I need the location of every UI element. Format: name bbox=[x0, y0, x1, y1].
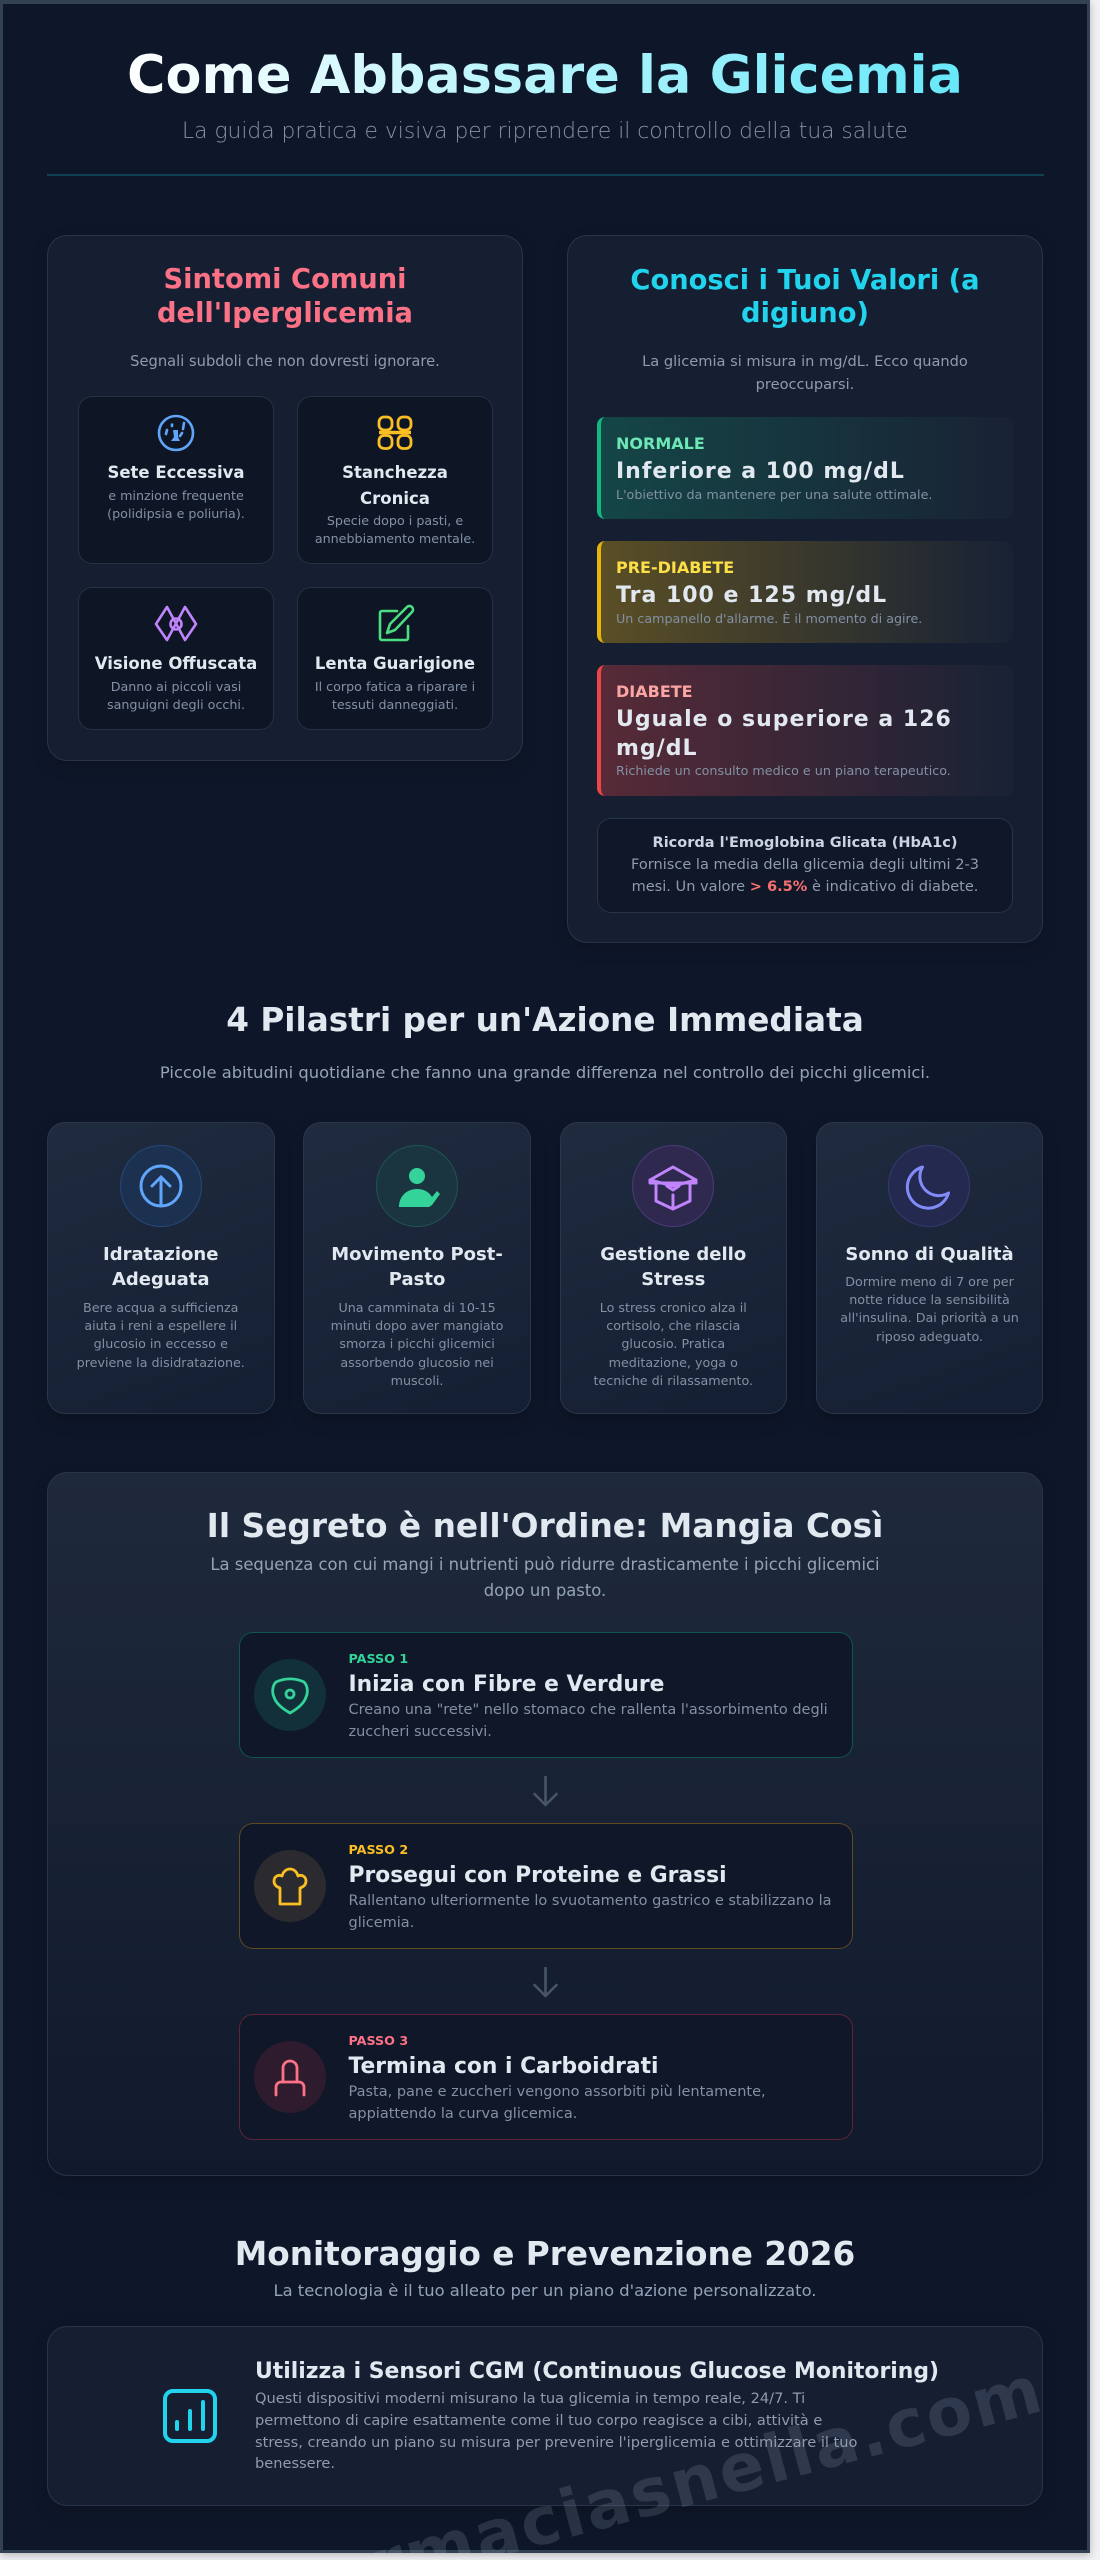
step title: Termina con i Carboidrati bbox=[348, 2054, 659, 2079]
pillar description: aiuta i reni a espellere il bbox=[84, 1318, 237, 1333]
pillar description: muscoli. bbox=[391, 1373, 443, 1388]
panel: eating order bbox=[47, 1472, 1043, 2176]
symptom description: Danno ai piccoli vasi bbox=[111, 679, 241, 694]
step description: Pasta, pane e zuccheri vengono assorbiti più lentamente, bbox=[348, 2084, 766, 2100]
level note: Richiede un consulto medico e un piano terapeutico. bbox=[616, 763, 951, 778]
symptom title: Visione Offuscata bbox=[95, 654, 257, 673]
pillar description: notte riduce la sensibilità bbox=[849, 1292, 1010, 1307]
pillar description: tecniche di rilassamento. bbox=[593, 1373, 753, 1388]
level note: L'obiettivo da mantenere per una salute ottimale. bbox=[616, 487, 932, 502]
subtitle: La guida pratica e visiva per riprendere il controllo della tua salute bbox=[182, 119, 908, 144]
level card: normal bbox=[597, 417, 1013, 519]
panel title: Utilizza i Sensori CGM (Continuous Glucose Monitoring) bbox=[255, 2359, 939, 2384]
symptom card: fatigue bbox=[297, 396, 493, 564]
section intro: eating order: La sequenza con cui mangi i nutrienti può ridurre drasticamente i picchi glicemici bbox=[210, 1555, 880, 1574]
pillar title bbox=[600, 1244, 746, 1290]
symptom description: annebbiamento mentale. bbox=[315, 531, 475, 546]
pillar description: previene la disidratazione. bbox=[77, 1355, 245, 1370]
pillar description: glucosio in eccesso e bbox=[94, 1336, 228, 1351]
symptom description: sanguigni degli occhi. bbox=[107, 697, 245, 712]
step 2 card bbox=[238, 1823, 852, 1949]
level card: pre-diabetes bbox=[597, 541, 1013, 643]
section heading: eating order: Il Segreto è nell'Ordine: Mangia Così bbox=[207, 1507, 883, 1545]
symptom card: slow healing bbox=[297, 587, 493, 730]
pillar title: Gestione dello bbox=[600, 1244, 746, 1265]
panel description bbox=[255, 2390, 857, 2472]
callout text: Fornisce la media della glicemia degli ultimi 2-3 bbox=[631, 856, 979, 873]
pillar title bbox=[103, 1244, 218, 1290]
pillar description: minuti dopo aver mangiato bbox=[331, 1318, 503, 1333]
symptom description: e minzione frequente bbox=[108, 488, 244, 503]
level label: DIABETE bbox=[616, 682, 693, 701]
pillar card: sleep bbox=[816, 1122, 1043, 1414]
icon: sleep bbox=[888, 1145, 970, 1227]
step label: PASSO 1 bbox=[348, 1651, 408, 1666]
step title: Inizia con Fibre e Verdure bbox=[348, 1672, 664, 1697]
level value: Uguale o superiore a 126 bbox=[616, 707, 952, 732]
symptom description bbox=[107, 679, 245, 712]
pillar card: stress bbox=[560, 1122, 787, 1414]
step description: glicemia. bbox=[348, 1915, 414, 1931]
panel heading: glucose values: Conosci i Tuoi Valori (a bbox=[630, 265, 980, 296]
pillar description: Bere acqua a sufficienza bbox=[83, 1300, 238, 1315]
step description: Creano una "rete" nello stomaco che rallenta l'assorbimento degli bbox=[348, 1702, 828, 1718]
arrow: step 2 to step 3 bbox=[533, 1967, 558, 1998]
symptom description: (polidipsia e poliuria). bbox=[107, 506, 245, 521]
level card: diabetes bbox=[597, 665, 1013, 796]
section intro: pillars: Piccole abitudini quotidiane che fanno una grande differenza nel controllo dei picchi glicemici. bbox=[160, 1063, 930, 1082]
level value bbox=[616, 707, 952, 761]
icon: thirst bbox=[158, 414, 194, 452]
panel description: stress, creando un piano su misura per prevenire l'iperglicemia e ottimizzare il tuo bbox=[255, 2434, 857, 2451]
values intro bbox=[642, 353, 968, 392]
panel heading: glucose values bbox=[630, 265, 980, 329]
header bbox=[47, 45, 1044, 176]
title: Come Abbassare la Glicemia bbox=[127, 45, 963, 106]
pillar title bbox=[331, 1244, 503, 1290]
pillar card: movement bbox=[303, 1122, 531, 1414]
icon: slow healing bbox=[378, 604, 414, 642]
panel: glucose values bbox=[567, 235, 1043, 943]
pillar description bbox=[840, 1274, 1019, 1344]
step description bbox=[348, 2084, 766, 2122]
arrow: step 1 to step 2 bbox=[533, 1776, 558, 1806]
step 3 card bbox=[238, 2014, 852, 2140]
values intro: La glicemia si misura in mg/dL. Ecco quando bbox=[642, 353, 968, 370]
symptom title bbox=[342, 463, 448, 508]
panel heading: glucose values: digiuno) bbox=[741, 298, 869, 329]
icon: hydration bbox=[120, 1145, 202, 1227]
level value: mg/dL bbox=[616, 736, 697, 761]
icon: blurred vision bbox=[154, 606, 198, 642]
icon: CGM chart bbox=[163, 2389, 217, 2443]
section intro: monitoring: La tecnologia è il tuo alleato per un piano d'azione personalizzato. bbox=[273, 2281, 816, 2300]
pillar title: Sonno di Qualità bbox=[845, 1244, 1014, 1265]
icon: fatigue bbox=[378, 416, 412, 450]
step label: PASSO 3 bbox=[348, 2033, 408, 2048]
panel heading: symptoms: dell'Iperglicemia bbox=[157, 298, 413, 329]
callout title: Ricorda l'Emoglobina Glicata (HbA1c) bbox=[653, 835, 957, 851]
symptom card: blurred vision bbox=[78, 587, 274, 730]
callout: HbA1c bbox=[597, 818, 1013, 913]
level label: PRE-DIABETE bbox=[616, 558, 734, 577]
symptom description: Il corpo fatica a riparare i bbox=[315, 679, 475, 694]
pillar description: meditazione, yoga o bbox=[609, 1355, 738, 1370]
symptom description bbox=[315, 679, 475, 712]
step description bbox=[348, 1702, 828, 1740]
symptom description bbox=[107, 488, 245, 521]
panel description: permettono di capire esattamente come il tuo corpo reagisce a cibi, attività e bbox=[255, 2412, 822, 2429]
step title: Prosegui con Proteine e Grassi bbox=[348, 1863, 727, 1888]
level value: Tra 100 e 125 mg/dL bbox=[616, 583, 887, 608]
pillar description: riposo adeguato. bbox=[876, 1329, 983, 1344]
callout text bbox=[631, 856, 979, 895]
header divider bbox=[47, 174, 1044, 176]
step label: PASSO 2 bbox=[348, 1842, 408, 1857]
panel heading: symptoms bbox=[157, 264, 413, 329]
icon: chef hat bbox=[254, 1850, 326, 1922]
pillar description: Una camminata di 10-15 bbox=[338, 1300, 496, 1315]
symptom description: tessuti danneggiati. bbox=[332, 697, 458, 712]
icon: carbohydrates bbox=[254, 2041, 326, 2113]
pillar description: Lo stress cronico alza il bbox=[600, 1300, 747, 1315]
section heading: pillars: 4 Pilastri per un'Azione Immediata bbox=[226, 1001, 864, 1039]
icon: fibre shield bbox=[254, 1659, 326, 1731]
pillar title: Movimento Post- bbox=[331, 1244, 503, 1265]
pillar title: Stress bbox=[641, 1269, 705, 1290]
step description bbox=[348, 1893, 831, 1931]
symptom description bbox=[315, 513, 475, 546]
symptom title: Stanchezza bbox=[342, 463, 448, 482]
pillar description bbox=[77, 1300, 245, 1370]
step description: zuccheri successivi. bbox=[348, 1724, 492, 1740]
step 1 card bbox=[238, 1632, 852, 1758]
symptom title: Sete Eccessiva bbox=[107, 463, 245, 482]
pillar description: glucosio. Pratica bbox=[621, 1336, 725, 1351]
pillar description: assorbendo glucosio nei bbox=[340, 1355, 494, 1370]
pillar description: Dormire meno di 7 ore per bbox=[845, 1274, 1014, 1289]
symptom card: thirst bbox=[78, 396, 274, 564]
pillar title: Idratazione bbox=[103, 1244, 218, 1265]
pillar description: all'insulina. Dai priorità a un bbox=[840, 1310, 1019, 1325]
symptom title: Lenta Guarigione bbox=[315, 654, 475, 673]
panel: CGM sensors bbox=[47, 2326, 1043, 2506]
section intro: eating order: dopo un pasto. bbox=[484, 1581, 606, 1600]
pillar card: hydration bbox=[47, 1122, 274, 1414]
symptom description: Specie dopo i pasti, e bbox=[327, 513, 463, 528]
icon: stress bbox=[632, 1145, 714, 1227]
pillar description: smorza i picchi glicemici bbox=[339, 1336, 495, 1351]
section heading: monitoring: Monitoraggio e Prevenzione 2026 bbox=[235, 2235, 855, 2273]
level value: Inferiore a 100 mg/dL bbox=[616, 459, 905, 484]
symptoms intro: Segnali subdoli che non dovresti ignorare. bbox=[130, 353, 440, 370]
pillar title: Pasto bbox=[389, 1269, 445, 1290]
icon: movement bbox=[376, 1145, 458, 1227]
step description: Rallentano ulteriormente lo svuotamento gastrico e stabilizzano la bbox=[348, 1893, 831, 1909]
pillar title: Adeguata bbox=[112, 1269, 210, 1290]
panel heading: symptoms: Sintomi Comuni bbox=[163, 264, 406, 295]
pillar description bbox=[331, 1300, 503, 1388]
symptom title: Cronica bbox=[360, 489, 430, 508]
panel description: benessere. bbox=[255, 2455, 335, 2472]
values intro: preoccuparsi. bbox=[756, 376, 854, 392]
pillar description: cortisolo, che rilascia bbox=[606, 1318, 740, 1333]
pillar description bbox=[593, 1300, 753, 1388]
step description: appiattendo la curva glicemica. bbox=[348, 2106, 577, 2122]
section intro: eating order bbox=[210, 1555, 880, 1600]
callout text: mesi. Un valore > 6.5% è indicativo di diabete. bbox=[632, 878, 978, 895]
level note: Un campanello d'allarme. È il momento di agire. bbox=[616, 611, 922, 626]
panel description: Questi dispositivi moderni misurano la tua glicemia in tempo reale, 24/7. Ti bbox=[255, 2390, 805, 2407]
panel: symptoms bbox=[47, 235, 523, 761]
level label: NORMALE bbox=[616, 434, 705, 453]
